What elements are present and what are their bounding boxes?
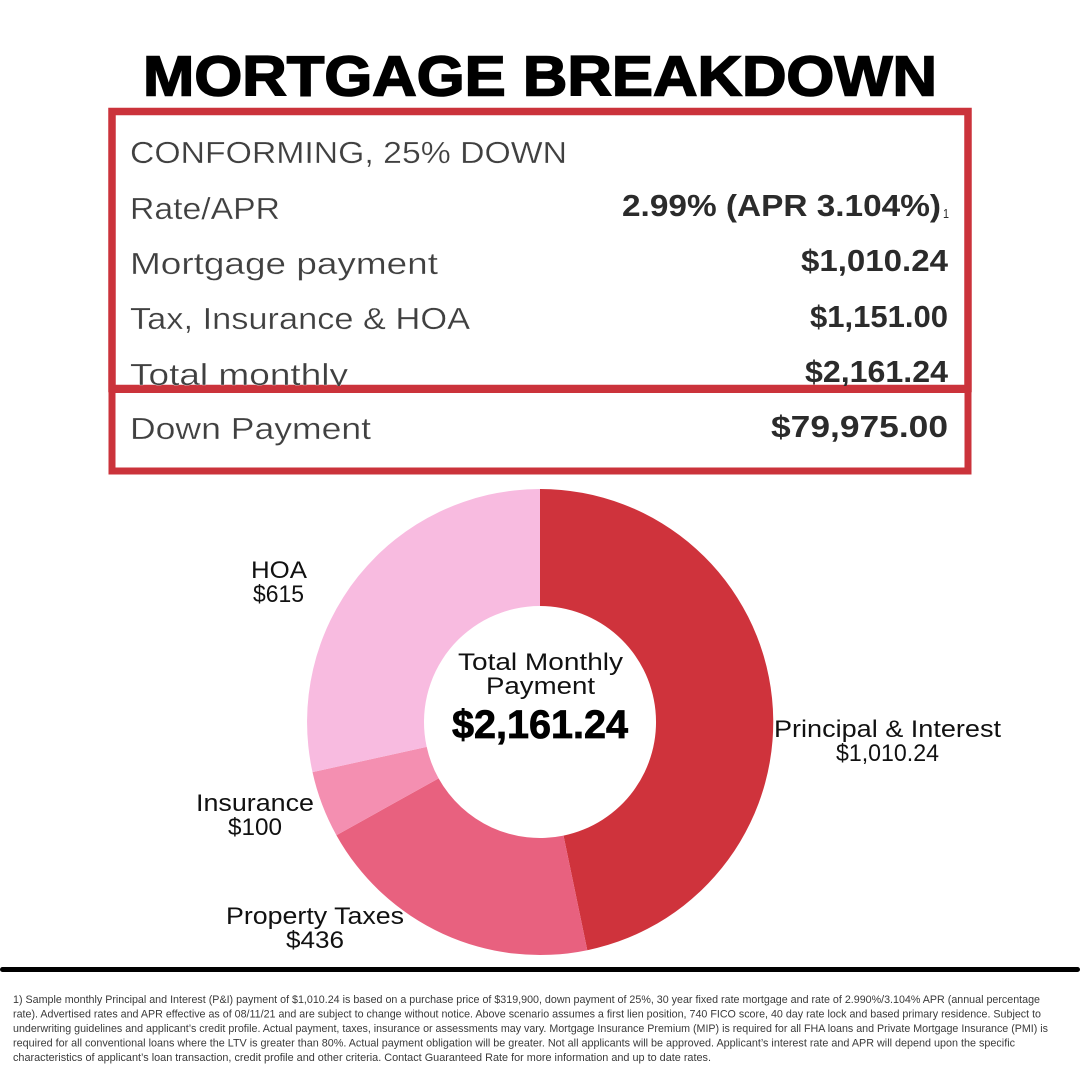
label: HOA [251,557,307,608]
row: mortgage payment value: $1,010.24 [801,243,949,278]
donut chart [307,489,773,955]
panel: down payment [112,390,968,471]
row: total monthly value: $2,161.24 [805,354,949,389]
label: property taxes: Property Taxes [226,903,404,930]
slice: principal and interest [540,489,773,950]
footnote text: underwriting guidelines and applicant’s credit profile. Actual payment, taxes, insurance or assessments may vary. Mortgage Insurance Premium (MIP) is required for all FHA loans and Private Mortgage Insurance (PMI) is [13,1023,1049,1035]
center label: total monthly payment [452,649,629,747]
footnote text: 1) Sample monthly Principal and Interest (P&I) payment of $1,010.24 is based on a purchase price of $319,900, down payment of 25%, 30 year fixed rate mortgage and rate of 2.990%/3.104% APR (annual percentage [13,994,1040,1006]
label: HOA: HOA [251,557,307,584]
label: principal and interest: $1,010.24 [836,740,939,767]
down payment value: $79,975.00 [771,409,948,444]
row: rate value: 2.99% (APR 3.104%) [622,188,941,223]
slice: property taxes [336,778,587,955]
label: principal and interest: Principal & Interest [774,716,1001,743]
down payment label: Down Payment [130,412,372,446]
label: HOA: $615 [253,581,304,608]
row: tax insurance HOA value: $1,151.00 [810,299,948,334]
label: insurance [196,790,314,841]
slice: insurance [312,747,439,835]
row: total monthly label: Total monthly [130,358,349,392]
label: insurance: $100 [228,814,282,841]
title: MORTGAGE BREAKDOWN [143,44,937,108]
label: insurance: Insurance [196,790,314,817]
label: property taxes: $436 [286,927,344,954]
row: mortgage payment label: Mortgage payment [130,247,439,281]
row: tax insurance HOA label: Tax, Insurance & HOA [130,302,471,336]
panel: loan details [112,112,968,392]
label: principal and interest [774,716,1001,767]
slice: HOA [307,489,540,772]
center label: total monthly payment: $2,161.24 [452,703,629,747]
footnote marker: 1 [943,206,949,221]
footnote text: rate). Advertised rates and APR effective as of 08/11/21 and are subject to change without notice. Above scenario assumes a first lien position, 740 FICO score, 40 day rate lock and based primary residence. Subject to [13,1008,1041,1020]
footnote text [13,994,1049,1064]
footnote text: characteristics of applicant’s loan transaction, credit profile and other criteria. Contact Guaranteed Rate for more information and up to date rates. [13,1052,711,1064]
center label: total monthly payment: Total Monthly [458,649,623,676]
center label: total monthly payment: Payment [486,673,595,700]
row: rate label: Rate/APR [130,192,280,226]
label: property taxes [226,903,404,954]
heading: loan type: CONFORMING, 25% DOWN [130,136,567,170]
footnote text: required for all conventional loans where the LTV is greater than 80%. Actual payment obligation will be greater. Not all applicants will be approved. Applicant’s interest rate and APR will depend upon the specific [13,1038,1016,1050]
